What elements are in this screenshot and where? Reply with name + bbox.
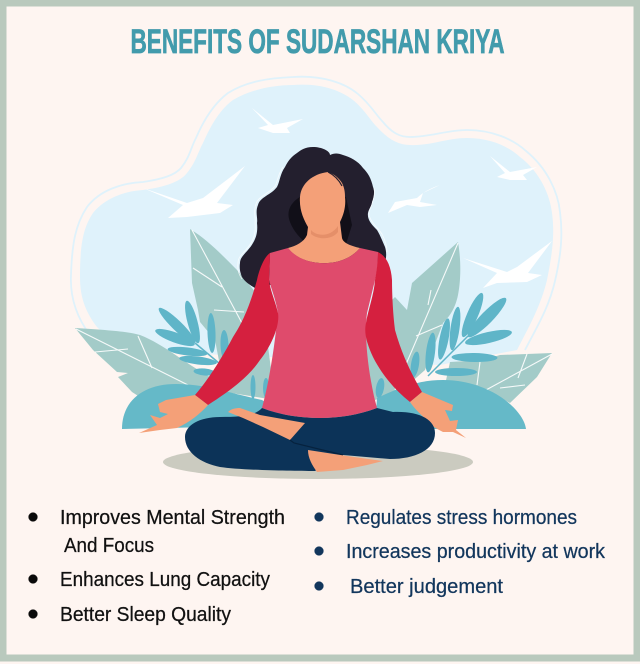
bullet: improves mental strength: And Focus <box>64 534 154 557</box>
bullet: improves mental strength <box>28 506 285 557</box>
bullet: better sleep quality: Better Sleep Quality <box>60 603 232 626</box>
woman: figure <box>139 147 466 472</box>
bullet: regulates stress hormones: Regulates stress hormones <box>346 506 577 529</box>
illustration: meditating woman scene <box>71 77 561 479</box>
foliage: big leaves <box>75 229 552 410</box>
chin shadow <box>311 226 338 238</box>
sky blob <box>80 85 553 365</box>
sprig stems <box>195 336 468 376</box>
right hand <box>410 392 466 438</box>
legs <box>185 408 435 471</box>
hair shadow behind neck <box>288 197 352 244</box>
hair highlight <box>238 167 387 279</box>
mound: left <box>122 384 300 429</box>
bullet: enhances lung capacity: Enhances Lung Capacity <box>60 568 271 591</box>
left sleeve <box>195 253 278 405</box>
bullet: improves mental strength: Improves Mental Strength <box>60 506 285 529</box>
floor shadow <box>163 445 473 479</box>
hair <box>240 147 386 288</box>
benefits list: left column <box>28 506 285 626</box>
right sleeve <box>365 252 422 402</box>
right foot <box>308 450 383 472</box>
leaf veins <box>76 230 552 390</box>
mound: right <box>375 380 526 429</box>
benefits list: right column <box>314 506 606 598</box>
hair strand on forehead <box>328 172 342 186</box>
top <box>262 248 378 418</box>
bullet: better judgement: Better judgement <box>350 575 503 598</box>
leg divider <box>290 440 343 455</box>
foliage: blue sprigs <box>154 291 513 399</box>
blob outline <box>71 77 561 350</box>
face and neck <box>288 172 360 263</box>
left foot <box>228 408 305 440</box>
bullet: increases productivity: Increases productivity at work <box>346 540 606 563</box>
birds <box>143 108 552 288</box>
left hand <box>139 395 208 433</box>
